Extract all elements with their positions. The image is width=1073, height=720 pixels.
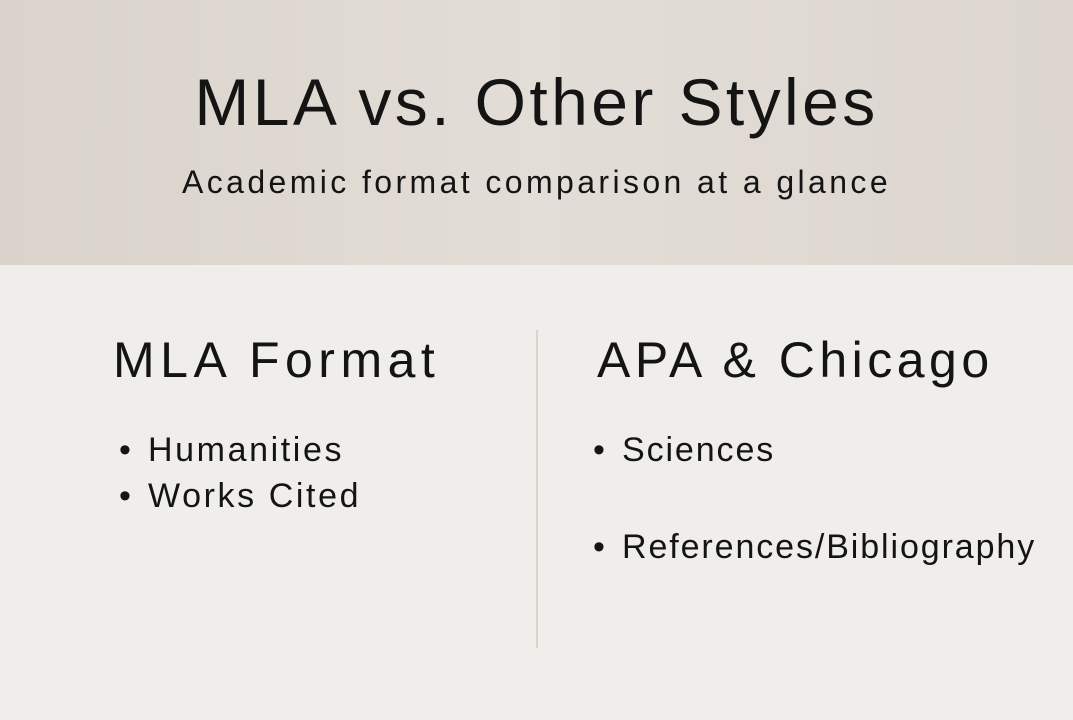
heading: MLA Format: MLA Format xyxy=(113,332,440,388)
panel: APA & Chicago xyxy=(593,332,1036,566)
bullet list: MLA xyxy=(119,431,361,515)
subtitle: Academic format comparison at a glance xyxy=(182,164,891,200)
bullet list: MLA: Humanities xyxy=(148,431,344,469)
bullet list: APA: References/Bibliography xyxy=(622,528,1036,566)
bullet list: APA: • xyxy=(593,528,607,566)
panel: MLA xyxy=(113,332,440,515)
header band xyxy=(0,0,1073,265)
divider xyxy=(536,330,538,648)
bullet list: APA: • xyxy=(593,431,607,469)
bullet list: MLA: Works Cited xyxy=(148,477,361,515)
bullet list: APA xyxy=(593,431,1036,566)
bullet list: MLA: • xyxy=(119,431,134,469)
title: MLA vs. Other Styles xyxy=(194,65,879,139)
bullet list: APA: Sciences xyxy=(622,431,775,469)
bullet list: MLA: • xyxy=(119,477,134,515)
heading: APA & Chicago: APA & Chicago xyxy=(597,332,994,388)
